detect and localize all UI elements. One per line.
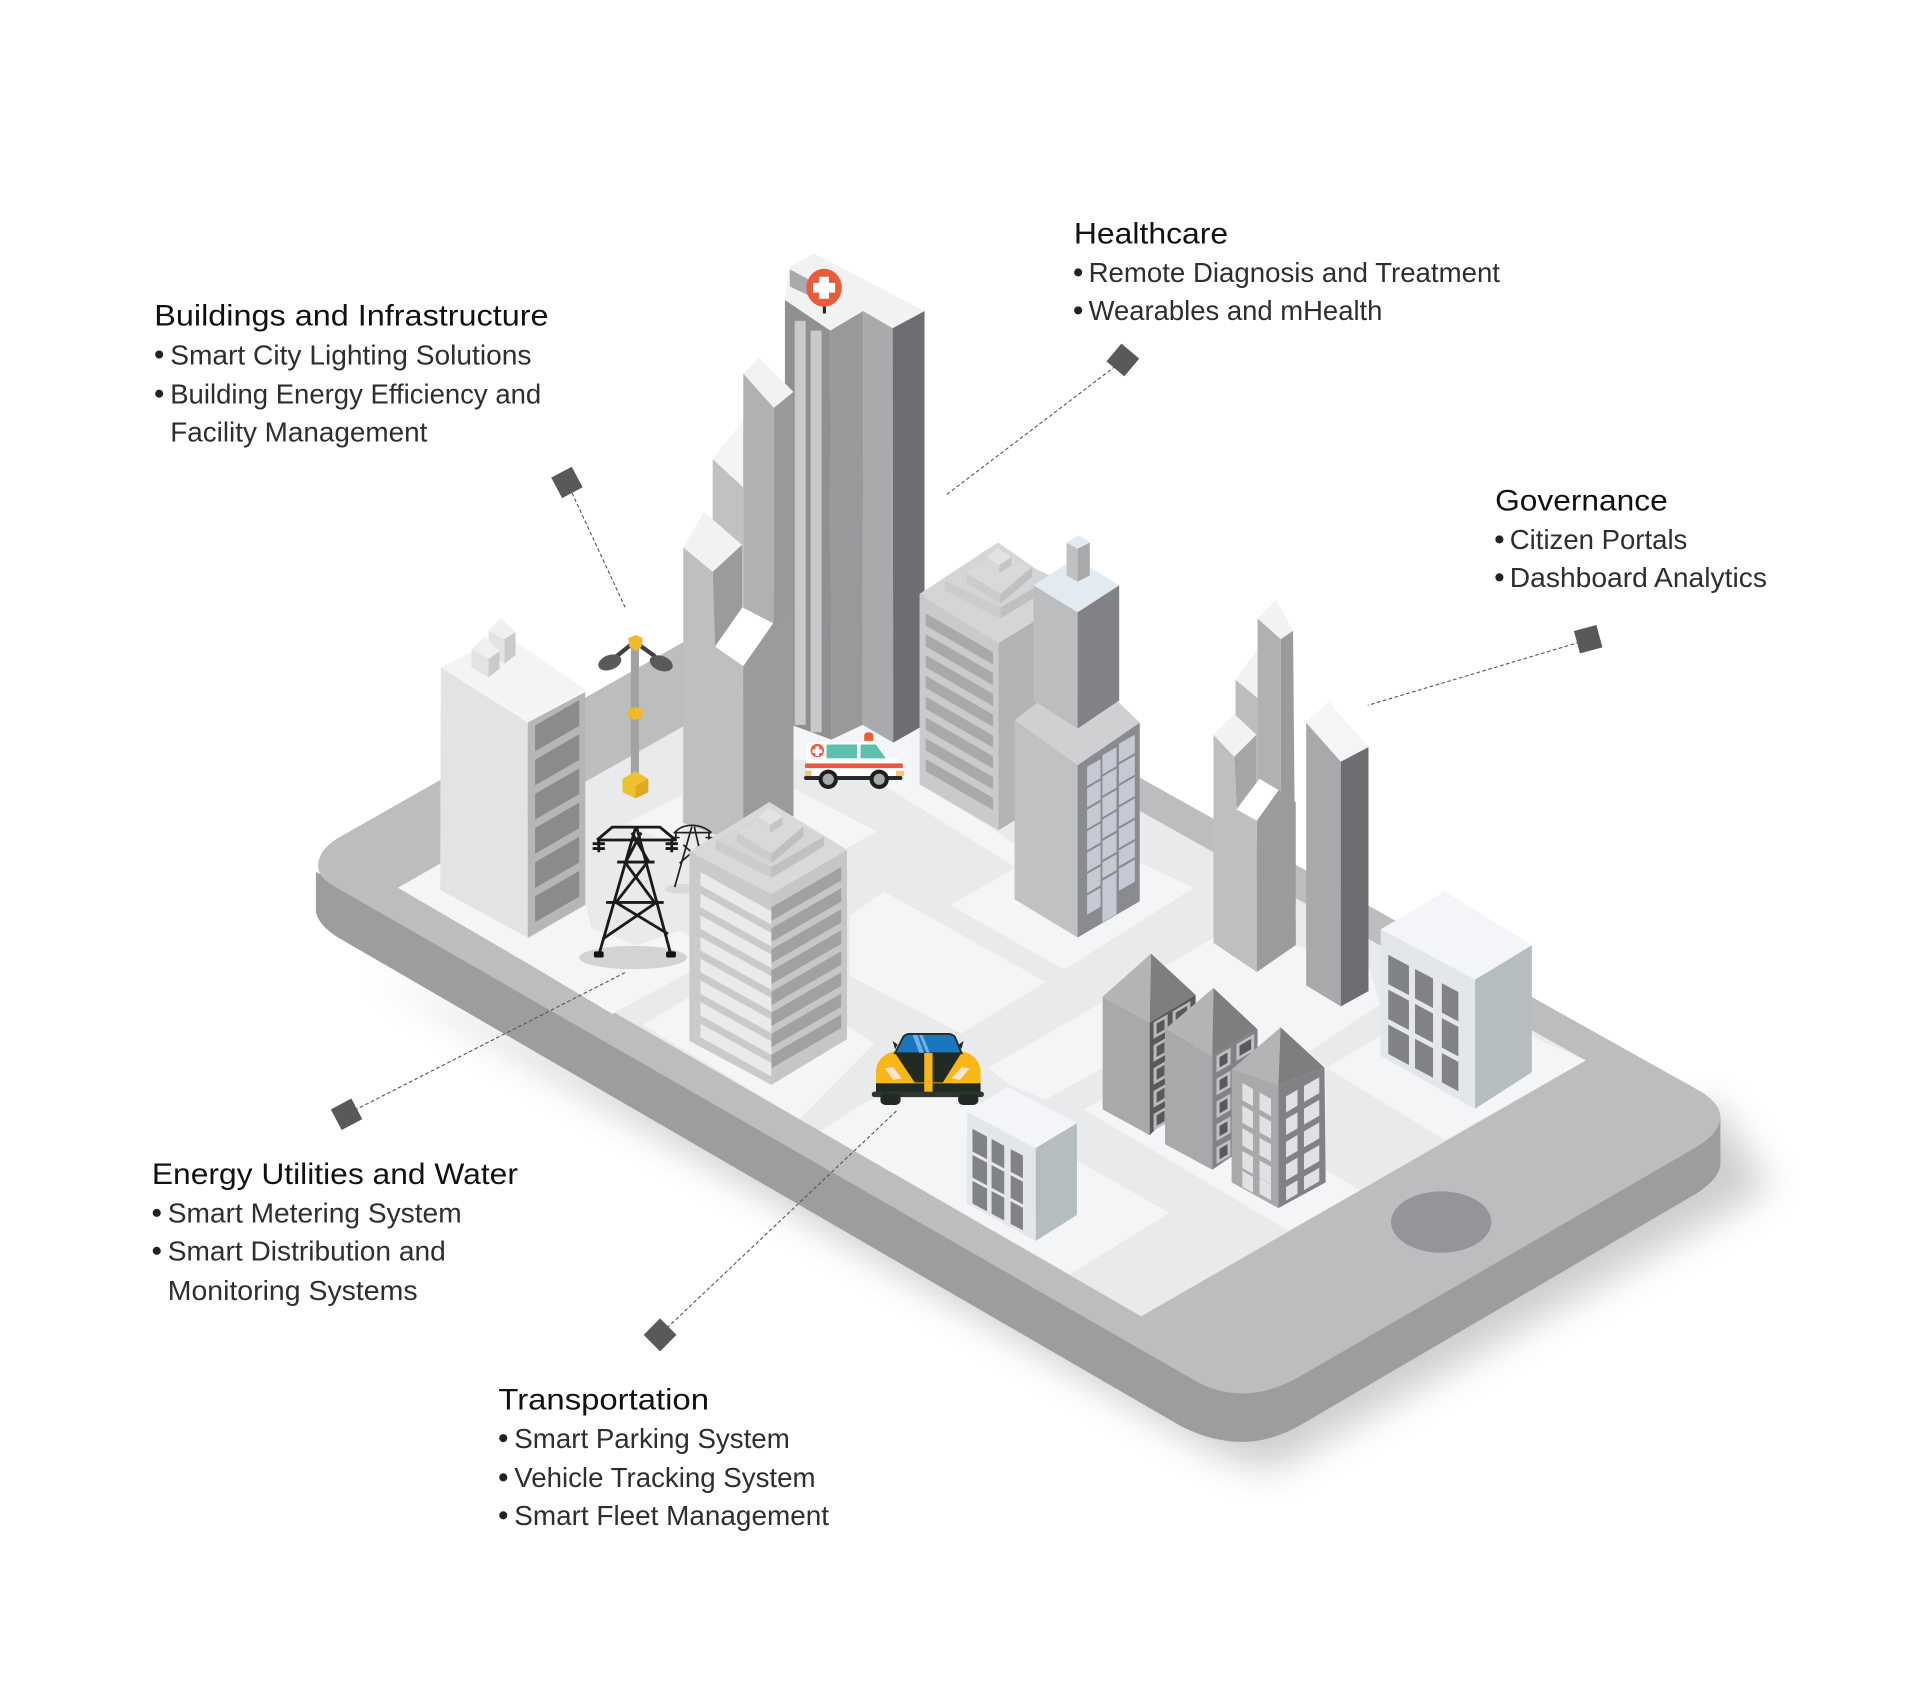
connector: healthcare [947,344,1139,495]
icon: yellow car [872,1034,984,1105]
text: transportation: Smart Parking System [514,1423,790,1454]
text: energy utilities and water: Monitoring Systems [168,1275,418,1306]
icon: small transmission tower [665,825,713,894]
building: ribbed mid tower [920,542,1075,830]
building: small front block [967,1087,1077,1241]
icon: main transmission tower [579,827,687,969]
rooftop boxes [471,618,516,677]
phone screen [398,640,1586,1316]
phone shadow [367,967,1769,1469]
connector: transportation [644,1110,898,1351]
phone side [316,872,1720,1442]
phone body [316,582,1720,1442]
text: healthcare [1074,218,1500,326]
phone top surface [318,582,1720,1393]
icon: street lamp [596,635,675,798]
text: governance [1495,485,1767,593]
icon: ambulance [804,732,904,789]
text: buildings and infrastructure: Smart City Lighting Solutions [170,339,531,370]
text: healthcare: Remote Diagnosis and Treatment [1089,257,1500,288]
building: pitched roof 1 [1103,954,1196,1135]
text: transportation: Transportation [498,1383,709,1416]
building: twin tower right [1213,600,1296,972]
connector: buildings [551,467,626,609]
text: healthcare: Healthcare [1074,218,1228,251]
text: buildings and infrastructure [154,300,549,447]
text: buildings and infrastructure: Building Energy Efficiency and [170,378,541,409]
text: governance: Citizen Portals [1510,524,1687,555]
text: buildings and infrastructure: Facility Management [170,416,428,447]
text: transportation: Vehicle Tracking System [514,1462,816,1493]
building: white block with window strips [440,618,585,938]
building: pitched roof 2 [1165,988,1258,1170]
text: buildings and infrastructure: Buildings and Infrastructure [154,300,549,333]
building: slim tower right [1306,702,1368,1006]
connector: governance [1368,625,1602,705]
building: stepped twin tower left [683,358,793,845]
text: healthcare: Wearables and mHealth [1089,295,1382,326]
text: energy utilities and water: Smart Distribution and [168,1236,446,1267]
building: tall stepped tower with glass [1015,535,1140,937]
text: energy utilities and water: Energy Utilities and Water [152,1158,518,1191]
text: governance: Dashboard Analytics [1510,562,1767,593]
home button [1391,1191,1491,1253]
building: pitched roof 3 [1232,1027,1326,1208]
text: energy utilities and water: Smart Metering System [168,1198,462,1229]
text: transportation: Smart Fleet Management [514,1500,829,1531]
building: block with nine windows [1381,891,1532,1109]
text: transportation [498,1383,829,1531]
building: hospital tower [785,253,924,743]
icon: hospital cross sign [806,269,842,313]
text: governance: Governance [1495,485,1668,518]
building: ribbed front tower [689,802,847,1085]
text: energy utilities and water [152,1158,518,1306]
connector: energy [331,972,626,1130]
